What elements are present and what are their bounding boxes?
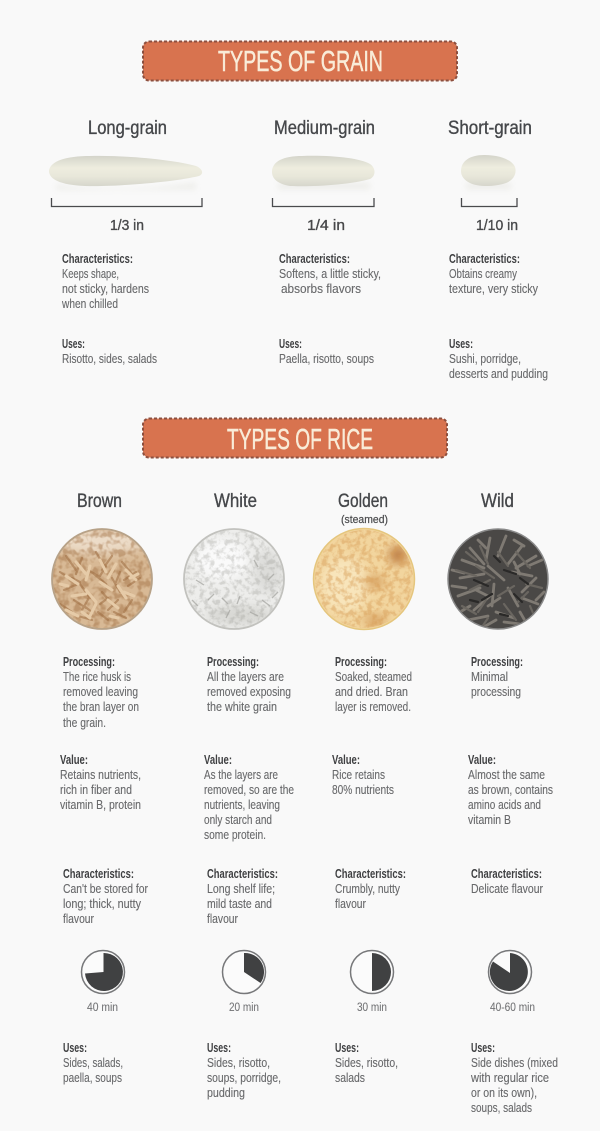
text: processing bbox=[471, 655, 523, 699]
text: characteristics bbox=[63, 867, 148, 926]
text: processing bbox=[63, 655, 139, 730]
size label: 1/4 in bbox=[307, 217, 345, 234]
text: value: as brown, contains bbox=[468, 783, 553, 797]
size bracket bbox=[462, 198, 517, 206]
text: processing: Processing: bbox=[335, 655, 387, 669]
heading: types of grain: TYPES OF GRAIN bbox=[218, 46, 383, 78]
label: 40-60 min: 40-60 min bbox=[490, 1002, 535, 1014]
text: characteristics: Characteristics: bbox=[335, 867, 406, 881]
label: 40 min: 40 min bbox=[87, 1002, 118, 1014]
text: uses: Risotto, sides, salads bbox=[62, 352, 157, 366]
column: wild rice bbox=[448, 491, 558, 1115]
text: uses bbox=[62, 337, 157, 366]
text: uses: soups, salads bbox=[471, 1101, 532, 1115]
heading: golden: Golden bbox=[338, 491, 388, 512]
icon: bowl of white rice bbox=[184, 529, 284, 629]
text: characteristics: Characteristics: bbox=[63, 867, 134, 881]
text: processing: Soaked, steamed bbox=[335, 670, 412, 684]
text: uses: desserts and pudding bbox=[449, 367, 548, 381]
size bracket bbox=[52, 198, 202, 206]
text: uses: pudding bbox=[207, 1086, 245, 1100]
text: value bbox=[332, 753, 394, 797]
text: characteristics bbox=[279, 252, 381, 296]
text: uses: salads bbox=[335, 1071, 365, 1085]
text: characteristics: Softens, a little sticky, bbox=[279, 267, 381, 281]
text: uses: Uses: bbox=[63, 1041, 87, 1055]
icon: timer 40 min bbox=[82, 950, 124, 994]
icon: timer 40-60 min bbox=[488, 950, 532, 994]
text: value bbox=[204, 753, 294, 842]
text: value: amino acids and bbox=[468, 798, 541, 812]
icon: bowl of brown rice bbox=[52, 528, 152, 629]
label: 20 min: 20 min bbox=[229, 1002, 259, 1014]
text: characteristics bbox=[471, 867, 543, 896]
heading: medium-grain: Medium-grain bbox=[274, 118, 375, 139]
text: uses: or on its own), bbox=[471, 1086, 537, 1100]
text: uses bbox=[279, 337, 374, 366]
text: characteristics: flavour bbox=[207, 912, 238, 926]
heading: white: White bbox=[214, 491, 257, 512]
banner: types of rice bbox=[143, 418, 447, 458]
heading: short-grain: Short-grain bbox=[448, 118, 532, 139]
icon: medium grain of rice bbox=[272, 156, 374, 190]
text: characteristics: mild taste and bbox=[207, 897, 272, 911]
column: medium-grain bbox=[272, 118, 381, 366]
text: value bbox=[468, 753, 553, 827]
text: uses: Sushi, porridge, bbox=[449, 352, 521, 366]
text: value: nutrients, leaving bbox=[204, 798, 280, 812]
text: characteristics: Obtains creamy bbox=[449, 267, 518, 281]
text: uses: Sides, salads, bbox=[63, 1056, 123, 1070]
subheading: steamed: (steamed) bbox=[341, 514, 388, 526]
text: characteristics: texture, very sticky bbox=[449, 282, 539, 296]
text: characteristics: flavour bbox=[63, 912, 94, 926]
text: value: Rice retains bbox=[332, 768, 385, 782]
text: uses bbox=[63, 1041, 123, 1085]
text: processing: layer is removed. bbox=[335, 700, 411, 714]
icon: timer 20 min bbox=[222, 950, 266, 994]
text: processing: removed leaving bbox=[63, 685, 138, 699]
text: processing: All the layers are bbox=[207, 670, 284, 684]
label: 30 min: 30 min bbox=[357, 1002, 387, 1014]
text: processing: the white grain bbox=[207, 700, 277, 714]
text: value: Retains nutrients, bbox=[60, 768, 141, 782]
icon: long grain of rice bbox=[49, 156, 202, 190]
column: short-grain bbox=[448, 118, 548, 381]
text: processing: Processing: bbox=[63, 655, 115, 669]
text: value: Almost the same bbox=[468, 768, 545, 782]
text: value: Value: bbox=[60, 753, 88, 767]
text: uses: paella, soups bbox=[63, 1071, 122, 1085]
text: characteristics: not sticky, hardens bbox=[62, 282, 149, 296]
icon: bowl of golden rice bbox=[314, 528, 414, 630]
text: uses: Uses: bbox=[62, 337, 85, 351]
text: uses: Uses: bbox=[207, 1041, 231, 1055]
text: uses bbox=[449, 337, 548, 381]
text: value: rich in fiber and bbox=[60, 783, 132, 797]
text: processing: processing bbox=[471, 685, 521, 699]
text: characteristics: Characteristics: bbox=[449, 252, 520, 266]
column: golden rice bbox=[314, 491, 414, 1085]
text: uses: Side dishes (mixed bbox=[471, 1056, 558, 1070]
text: characteristics: Delicate flavour bbox=[471, 882, 543, 896]
text: processing: removed exposing bbox=[207, 685, 291, 699]
text: value: only starch and bbox=[204, 813, 272, 827]
icon: timer 30 min bbox=[350, 950, 394, 994]
size label: 1/10 in bbox=[476, 217, 518, 234]
text: characteristics: Keeps shape, bbox=[62, 267, 119, 281]
text: value: Value: bbox=[468, 753, 496, 767]
text: processing: Processing: bbox=[471, 655, 523, 669]
text: processing bbox=[207, 655, 291, 714]
text: value: Value: bbox=[204, 753, 232, 767]
text: characteristics: absorbs flavors bbox=[281, 282, 361, 296]
text: value: some protein. bbox=[204, 828, 266, 842]
text: uses: Uses: bbox=[449, 337, 473, 351]
text: characteristics: when chilled bbox=[61, 297, 118, 311]
text: processing: Processing: bbox=[207, 655, 259, 669]
heading: brown: Brown bbox=[77, 491, 122, 512]
text: characteristics: Characteristics: bbox=[62, 252, 133, 266]
text: uses: Uses: bbox=[471, 1041, 495, 1055]
text: uses bbox=[207, 1041, 281, 1100]
text: characteristics: Characteristics: bbox=[471, 867, 542, 881]
size label: 1/3 in bbox=[110, 217, 144, 234]
text: value: vitamin B bbox=[468, 813, 511, 827]
text: characteristics: flavour bbox=[335, 897, 366, 911]
text: uses bbox=[335, 1041, 398, 1085]
icon: short grain of rice bbox=[461, 155, 516, 190]
text: uses: with regular rice bbox=[470, 1071, 549, 1085]
text: value: Value: bbox=[332, 753, 360, 767]
text: characteristics: Can't be stored for bbox=[63, 882, 148, 896]
text: processing bbox=[335, 655, 412, 714]
text: uses: soups, porridge, bbox=[207, 1071, 281, 1085]
text: processing: the bran layer on bbox=[63, 700, 139, 714]
column: brown rice bbox=[52, 491, 152, 1085]
text: value: 80% nutrients bbox=[332, 783, 394, 797]
text: uses bbox=[470, 1041, 558, 1115]
text: processing: Minimal bbox=[471, 670, 508, 684]
text: processing: and dried. Bran bbox=[335, 685, 408, 699]
heading: long-grain: Long-grain bbox=[88, 118, 167, 139]
heading: types of rice: TYPES OF RICE bbox=[227, 424, 373, 456]
text: processing: The rice husk is bbox=[63, 670, 131, 684]
text: uses: Sides, risotto, bbox=[335, 1056, 398, 1070]
text: value: vitamin B, protein bbox=[60, 798, 141, 812]
text: characteristics: long; thick, nutty bbox=[63, 897, 142, 911]
column: long-grain bbox=[49, 118, 202, 366]
column: white rice bbox=[184, 491, 294, 1100]
text: characteristics bbox=[61, 252, 149, 311]
icon: bowl of wild rice bbox=[448, 529, 548, 630]
text: characteristics bbox=[335, 867, 406, 911]
text: value: removed, so are the bbox=[204, 783, 294, 797]
text: uses: Uses: bbox=[279, 337, 302, 351]
text: processing: the grain. bbox=[63, 716, 106, 730]
text: value bbox=[60, 753, 141, 812]
banner: types of grain bbox=[143, 42, 457, 80]
text: uses: Uses: bbox=[335, 1041, 359, 1055]
text: characteristics bbox=[449, 252, 539, 296]
text: characteristics: Characteristics: bbox=[279, 252, 350, 266]
text: characteristics: Characteristics: bbox=[207, 867, 278, 881]
text: value: As the layers are bbox=[204, 768, 278, 782]
text: uses: Paella, risotto, soups bbox=[279, 352, 374, 366]
heading: wild: Wild bbox=[481, 491, 514, 512]
text: characteristics: Long shelf life; bbox=[207, 882, 275, 896]
text: characteristics bbox=[207, 867, 278, 926]
text: uses: Sides, risotto, bbox=[207, 1056, 270, 1070]
size bracket bbox=[272, 198, 374, 206]
text: characteristics: Crumbly, nutty bbox=[335, 882, 401, 896]
